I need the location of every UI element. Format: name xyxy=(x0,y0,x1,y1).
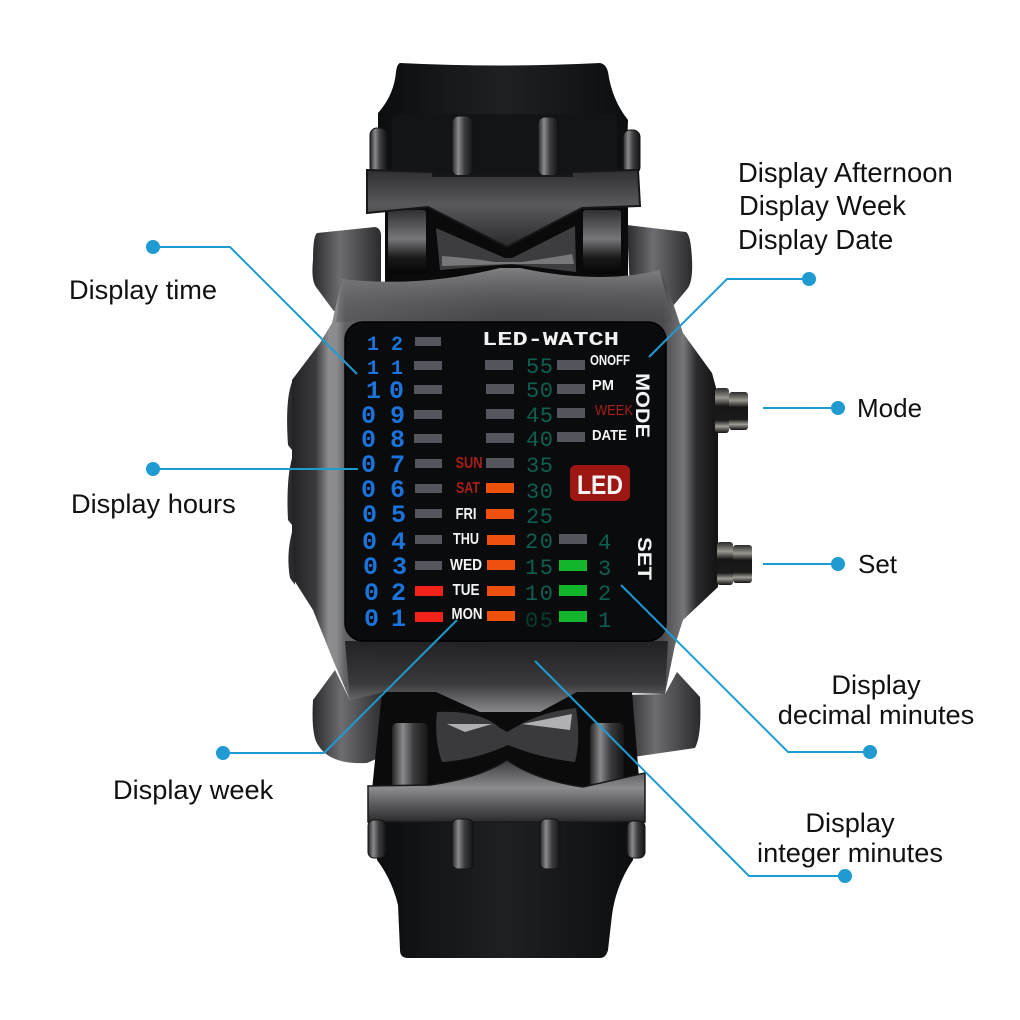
watch case xyxy=(292,268,718,700)
five minute digits: 35 xyxy=(526,454,553,479)
decimal minute digits: 2 xyxy=(598,582,611,607)
label: display decimal minutes: decimal minutes xyxy=(778,699,974,730)
five minute digits: 50 xyxy=(526,379,553,404)
callout: decimal minutes xyxy=(621,585,877,759)
five minute digits: 45 xyxy=(526,404,553,429)
label: display time: Display time xyxy=(69,274,217,305)
top clasp loops xyxy=(370,116,640,176)
bottom lugs xyxy=(313,670,385,763)
weekday labels: SUN xyxy=(456,455,482,472)
label: display integer minutes: Display xyxy=(805,807,895,838)
bottom hinges and bridge xyxy=(372,692,640,790)
five minute digits: 30 xyxy=(526,480,553,505)
bottom clasp plate xyxy=(368,760,645,822)
mode button xyxy=(715,388,748,433)
callout: set xyxy=(763,557,845,571)
hour indicator bars xyxy=(414,337,443,622)
top bridge xyxy=(436,226,576,272)
hour digits: 0 5 xyxy=(362,501,406,530)
hour digits: 0 8 xyxy=(361,426,405,455)
callout: mode xyxy=(763,401,845,415)
label: set: Set xyxy=(858,549,898,579)
LED display panel xyxy=(345,322,666,641)
weekday and minute bars xyxy=(485,360,515,621)
MODE label: MODE xyxy=(631,373,652,438)
top lugs xyxy=(312,227,381,320)
five minute digits: 40 xyxy=(526,428,553,453)
label: display hours: Display hours xyxy=(71,488,236,519)
weekday labels: TUE xyxy=(452,582,480,599)
hour digits: 0 3 xyxy=(363,553,407,582)
five minute digits: 15 xyxy=(525,556,553,581)
label: display week: Display week xyxy=(113,774,274,805)
five minute digits: 20 xyxy=(525,530,553,555)
five minute digits xyxy=(525,355,553,634)
hour digits: 1 1 xyxy=(367,358,403,381)
top strap xyxy=(378,63,628,180)
status labels xyxy=(590,352,633,444)
callout: display time xyxy=(146,240,357,374)
decimal minute digits: 3 xyxy=(598,557,611,582)
decimal minute digits: 4 xyxy=(598,531,611,556)
status labels: WEEK xyxy=(595,402,633,419)
status labels: DATE xyxy=(592,427,627,444)
bottom strap xyxy=(377,822,633,958)
watch illustration xyxy=(287,63,752,958)
hour digits: 0 1 xyxy=(364,605,406,634)
callout: display afternoon, week, date xyxy=(649,272,816,357)
label: display afternoon, week, date: Display Date xyxy=(738,224,893,255)
weekday labels: FRI xyxy=(456,506,476,523)
bottom clasp loops xyxy=(368,819,645,869)
screen background xyxy=(345,322,666,641)
top hinges xyxy=(385,205,628,285)
hour digits: 0 2 xyxy=(364,579,406,608)
label: display decimal minutes: Display xyxy=(831,669,921,700)
label: mode: Mode xyxy=(857,393,922,423)
hour digits: 0 6 xyxy=(361,476,405,505)
hour digits: 1 2 xyxy=(367,334,403,357)
hour digits xyxy=(361,334,407,634)
label: display integer minutes: integer minutes xyxy=(757,837,943,868)
five minute digits: 25 xyxy=(526,505,553,530)
LED badge: LED xyxy=(577,470,623,500)
hour digits: 0 4 xyxy=(362,528,406,557)
five minute digits: 10 xyxy=(525,582,553,607)
display brand: LED-WATCH: LED-WATCH xyxy=(482,329,619,351)
hour digits: 1 0 xyxy=(366,377,404,406)
SET label: SET xyxy=(633,537,654,580)
left side buttons xyxy=(287,382,295,585)
callout: integer minutes xyxy=(535,661,852,883)
hour digits: 0 7 xyxy=(361,451,405,480)
weekday labels: THU xyxy=(453,531,479,548)
label: display integer minutes xyxy=(757,807,943,868)
top strap roller xyxy=(392,114,617,180)
label: display afternoon, week, date xyxy=(738,157,953,255)
callout: display week xyxy=(216,620,457,760)
callout: display hours xyxy=(146,462,358,476)
label: display afternoon, week, date: Display Week xyxy=(739,190,906,221)
weekday labels: WED xyxy=(450,557,482,574)
case top band xyxy=(336,268,672,322)
label: display decimal minutes xyxy=(778,669,974,730)
weekday labels xyxy=(450,455,482,623)
status bars xyxy=(557,360,587,622)
top clasp plate xyxy=(367,170,640,247)
case bottom band xyxy=(345,641,668,712)
five minute digits: 55 xyxy=(526,355,553,380)
five minute digits: 05 xyxy=(525,609,553,634)
decimal minute digits xyxy=(598,531,611,634)
status labels: PM xyxy=(592,377,614,394)
status labels: ONOFF xyxy=(590,352,630,369)
decimal minute digits: 1 xyxy=(598,609,611,634)
set button xyxy=(717,542,752,585)
label: display afternoon, week, date: Display Afternoon xyxy=(738,157,953,188)
weekday labels: MON xyxy=(452,606,482,623)
hour digits: 0 9 xyxy=(361,402,405,431)
weekday labels: SAT xyxy=(456,480,480,497)
